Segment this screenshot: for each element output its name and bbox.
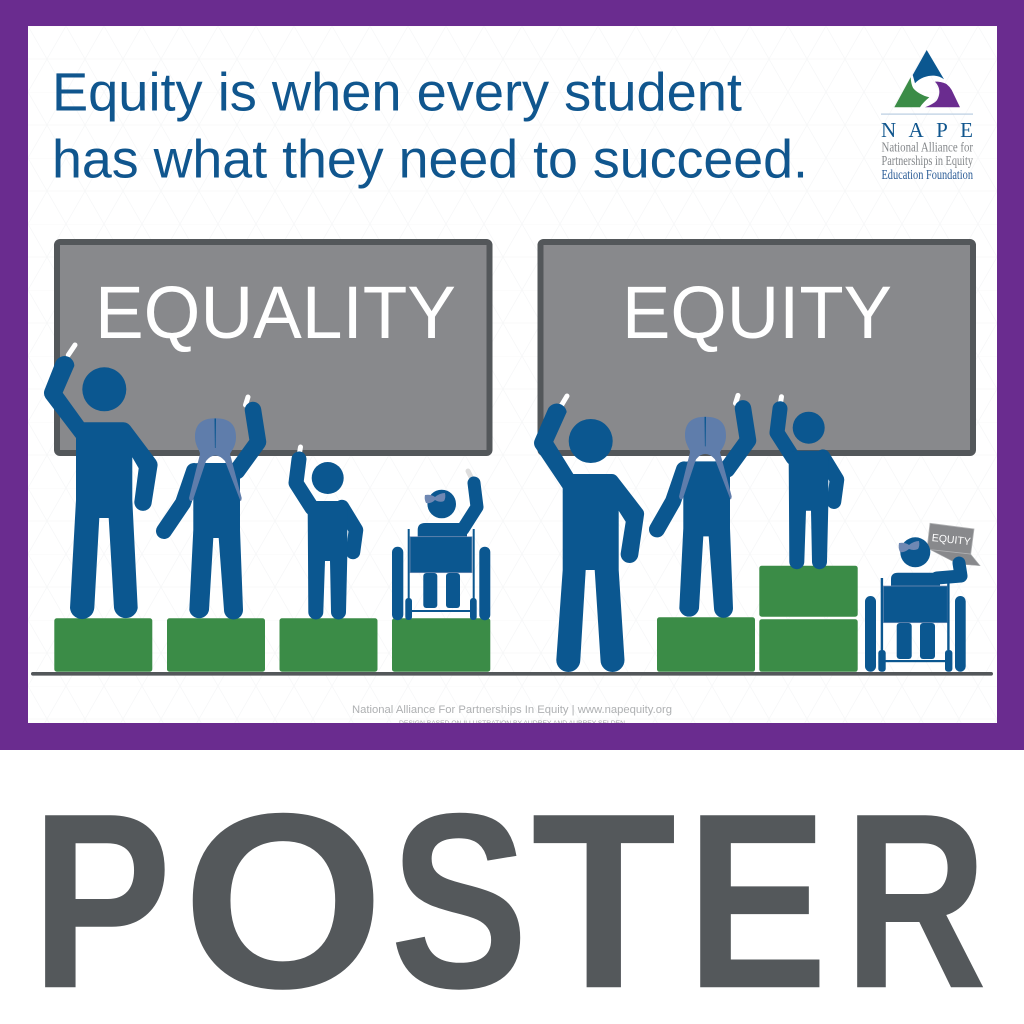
laptop xyxy=(927,523,980,566)
logo triangle mark xyxy=(894,50,960,107)
title xyxy=(52,62,808,189)
panel: equality chalkboard xyxy=(57,242,490,453)
equality boxes xyxy=(54,618,490,672)
hair bow xyxy=(899,541,919,552)
NAPE logo xyxy=(881,50,973,183)
hair bow xyxy=(425,493,445,503)
equity boxes xyxy=(657,566,858,672)
footer credit: National Alliance For Partnerships In Equity | www.napequity.org xyxy=(352,704,672,716)
equality figure: child xyxy=(296,447,356,620)
design credit: DESIGN BASED ON ILLUSTRATION BY AUDREY AND AUBREY SELDEN xyxy=(399,720,625,727)
poster label xyxy=(31,761,987,1024)
equity figure: student in wheelchair with laptop xyxy=(865,523,980,672)
equality figure: student in wheelchair xyxy=(392,471,490,620)
panel: equity chalkboard xyxy=(540,242,973,453)
heading: equity: EQUITY xyxy=(622,271,892,354)
heading: equality: EQUALITY xyxy=(95,271,456,354)
title: Equity is when every student xyxy=(52,62,742,122)
logo organization name: National Alliance for xyxy=(882,141,973,156)
title: has what they need to succeed. xyxy=(52,129,808,189)
floor line xyxy=(31,672,993,676)
laptop: EQUITY xyxy=(931,532,971,548)
logo wordmark: NAPE xyxy=(881,118,973,142)
logo organization name xyxy=(882,141,973,183)
equality figure: girl with pigtails xyxy=(164,397,258,620)
purple frame xyxy=(0,0,1024,750)
equity figure: tall person standing on floor xyxy=(534,396,644,672)
equity figure: girl with pigtails on one box xyxy=(657,395,748,618)
equality figure: tall person xyxy=(44,345,158,619)
logo organization name: Partnerships in Equity xyxy=(882,154,973,169)
poster white background xyxy=(28,26,997,723)
equity figure: child on two boxes xyxy=(777,397,837,569)
logo organization name: Education Foundation xyxy=(882,168,973,183)
